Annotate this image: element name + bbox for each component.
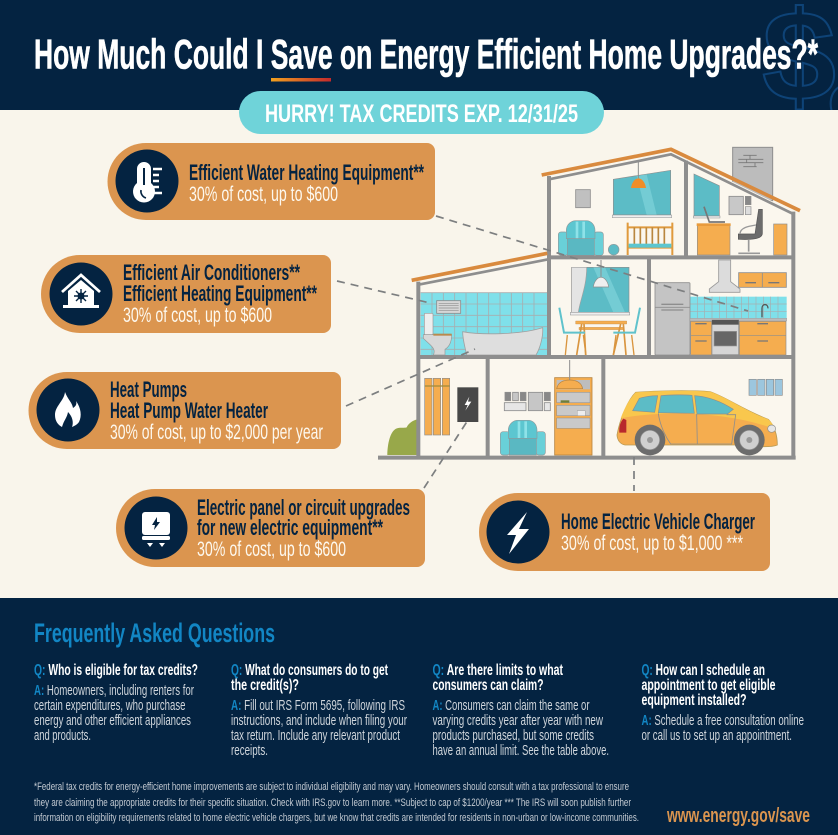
home office bbox=[693, 174, 787, 255]
FAQ 3: have an annual limit. See the table above. bbox=[432, 742, 609, 759]
backsplash bbox=[690, 297, 787, 319]
FAQ 4 bbox=[642, 662, 804, 744]
callout: electric panel bbox=[116, 489, 425, 567]
callout: EV charger: 30% of cost, up to $1,000 *** bbox=[561, 531, 743, 555]
FAQ 2: Q: What do consumers do to get bbox=[231, 662, 388, 679]
FAQ 2: receipts. bbox=[231, 742, 268, 759]
deadline pill bbox=[239, 91, 604, 134]
callout: air conditioners and heating: Efficient Heating Equipment** bbox=[123, 281, 317, 306]
icon: lightning bolt bbox=[507, 512, 529, 554]
utility room bbox=[425, 378, 478, 435]
callout: EV charger bbox=[479, 493, 770, 571]
dining room bbox=[559, 260, 640, 355]
FAQ 1: certain expenditures, who purchase bbox=[34, 697, 186, 714]
callout: electric panel: 30% of cost, up to $600 bbox=[197, 537, 346, 561]
FAQ 3: consumers can claim? bbox=[432, 677, 544, 694]
fridge bbox=[655, 283, 690, 355]
bathroom bbox=[421, 293, 547, 355]
icon: house with sun bbox=[62, 275, 100, 308]
living room bbox=[500, 360, 592, 455]
callout: water heating: 30% of cost, up to $600 bbox=[189, 182, 338, 206]
bush bbox=[387, 419, 417, 455]
upstairs bedroom bbox=[558, 162, 672, 255]
base cabinets bbox=[690, 318, 787, 355]
faucet bbox=[762, 305, 768, 317]
bookcase bbox=[555, 378, 592, 455]
house illustration bbox=[378, 147, 800, 459]
dashed connector lines bbox=[337, 216, 748, 491]
FAQ 4: Q: How can I schedule an bbox=[642, 662, 765, 679]
FAQ 2: A: Fill out IRS Form 5695, following IRS bbox=[231, 697, 405, 714]
garage bbox=[617, 379, 782, 455]
callout: heat pumps bbox=[29, 372, 341, 449]
FAQ 2: instructions, and include when filing your bbox=[231, 712, 407, 729]
water heater panels bbox=[425, 378, 450, 435]
FAQ heading: Frequently Asked Questions bbox=[34, 618, 275, 648]
callout: heat pumps: 30% of cost, up to $2,000 per year bbox=[110, 420, 323, 444]
oven bbox=[712, 320, 739, 355]
FAQ 2: tax return. Include any relevant product bbox=[231, 727, 401, 744]
footnote bbox=[34, 781, 639, 824]
callout: electric panel: for new electric equipment** bbox=[197, 515, 383, 540]
FAQ 3 bbox=[432, 662, 609, 759]
range hood bbox=[709, 260, 740, 292]
FAQ 1: Q: Who is eligible for tax credits? bbox=[34, 662, 198, 679]
footnote: *Federal tax credits for energy-efficient home improvements are subject to individual eligibility and may vary. Homeowners should consult with a tax professional to ensure bbox=[34, 781, 629, 793]
FAQ 1 bbox=[34, 662, 198, 744]
title underline bbox=[271, 78, 331, 82]
callout: water heating: Efficient Water Heating Equipment** bbox=[189, 160, 424, 185]
vent bbox=[437, 301, 461, 313]
header band bbox=[0, 0, 838, 110]
crib bbox=[628, 223, 672, 255]
callout: air conditioners and heating bbox=[41, 255, 331, 333]
FAQ 3: varying credits year after year with new bbox=[432, 712, 603, 729]
roof bbox=[412, 149, 800, 280]
electric panel bbox=[457, 387, 478, 422]
callout: water heating bbox=[108, 143, 435, 220]
wall cabinets bbox=[739, 273, 786, 287]
callout: air conditioners and heating: 30% of cost, up to $600 bbox=[123, 303, 272, 327]
FAQ 2: the credit(s)? bbox=[231, 677, 299, 694]
deadline pill: HURRY! TAX CREDITS EXP. 12/31/25 bbox=[265, 100, 578, 128]
house walls bbox=[378, 154, 796, 459]
FAQ 1: and products. bbox=[34, 727, 91, 744]
callout: air conditioners and heating: Efficient Air Conditioners** bbox=[123, 260, 300, 285]
FAQ 4: appointment to get eligible bbox=[642, 677, 776, 694]
callout: electric panel: Electric panel or circuit upgrades bbox=[197, 495, 410, 520]
FAQ 1: A: Homeowners, including renters for bbox=[34, 682, 194, 699]
FAQ 4: equipment installed? bbox=[642, 692, 746, 709]
icon: flame bbox=[55, 392, 81, 427]
bathtub bbox=[463, 328, 543, 355]
footnote: they are claiming the appropriate credits for their specific situation. Check with IRS.gov to learn more. **Subject to cap of $1200/year *** The IRS will soon publish further bbox=[34, 797, 631, 809]
icon: thermometer bbox=[133, 162, 162, 202]
FAQ 1: energy and other efficient appliances bbox=[34, 712, 191, 729]
FAQ panel bbox=[0, 598, 838, 835]
FAQ 2 bbox=[231, 662, 407, 759]
callout: heat pumps: Heat Pump Water Heater bbox=[110, 398, 268, 423]
FAQ 3: Q: Are there limits to what bbox=[432, 662, 563, 679]
interior fill bbox=[418, 152, 793, 457]
kitchen bbox=[655, 260, 787, 355]
icon: electric panel bbox=[142, 512, 170, 547]
wall tile bbox=[421, 293, 547, 355]
chimney bbox=[733, 147, 773, 201]
callout: heat pumps: Heat Pumps bbox=[110, 377, 187, 402]
FAQ 3: A: Consumers can claim the same or bbox=[432, 697, 590, 714]
car bbox=[617, 391, 777, 455]
office chair bbox=[738, 209, 762, 253]
FAQ 3: products purchased, but some credits bbox=[432, 727, 594, 744]
toilet bbox=[423, 313, 452, 355]
